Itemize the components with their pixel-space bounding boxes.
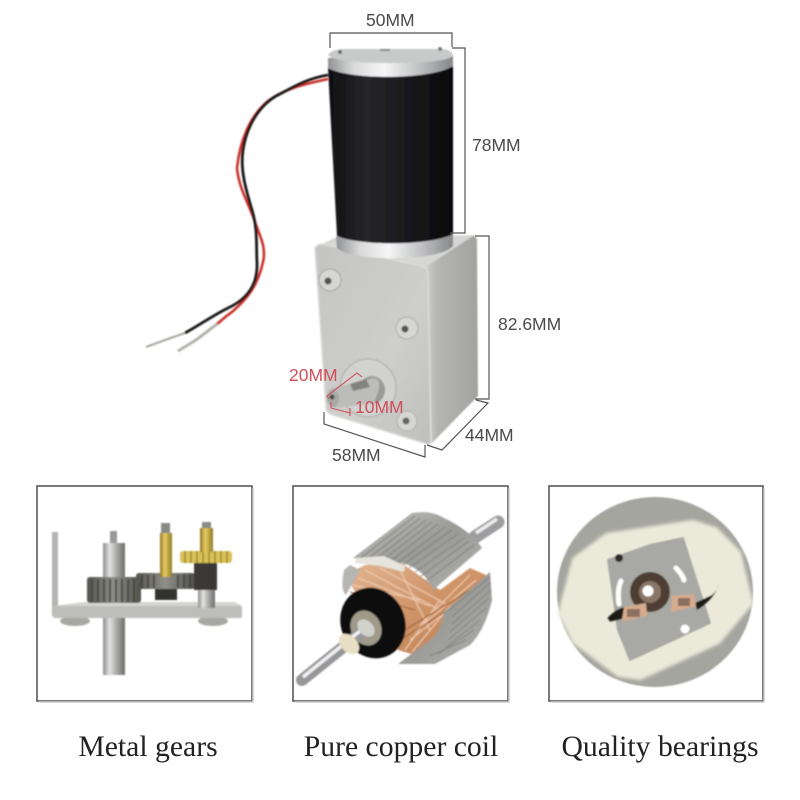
lower lamination: [398, 572, 492, 664]
motor body: [328, 66, 453, 243]
gearbox: [315, 235, 478, 444]
product photo: worm gear motor: [146, 47, 478, 444]
caption: Quality bearings: Quality bearings: [561, 731, 759, 763]
black washer: [329, 577, 417, 669]
copper windings: [345, 562, 486, 655]
dimension brackets: [324, 33, 489, 457]
panel: metal gears: [37, 486, 253, 702]
panel: bearings: [549, 486, 764, 702]
gear assembly illustration: [52, 522, 242, 675]
plastic housing: [561, 523, 750, 677]
output shaft: [327, 359, 396, 417]
brush arm: [607, 607, 625, 622]
mounting bolt: [319, 269, 341, 291]
collar: [335, 630, 363, 658]
bushing: [630, 572, 670, 612]
label: 20MM: 20MM: [289, 365, 338, 385]
red shaft brackets: [327, 373, 362, 416]
bearing illustration: [557, 497, 753, 687]
left stator edge: [342, 565, 360, 595]
copper brush tab: [622, 603, 647, 621]
brush arm: [695, 583, 719, 610]
mounting bolt: [397, 411, 417, 431]
upper lamination: [353, 512, 482, 590]
label: 50MM: 50MM: [366, 10, 415, 30]
motor base ring: [336, 232, 453, 258]
mounting bolt: [396, 317, 418, 339]
caption: Metal gears: Metal gears: [78, 731, 218, 763]
caption: Pure copper coil: Pure copper coil: [304, 731, 498, 763]
motor wires: [146, 75, 328, 351]
label: 44MM: 44MM: [465, 425, 514, 445]
label: 58MM: 58MM: [332, 445, 381, 465]
slots: [618, 581, 621, 604]
front shaft: [302, 632, 362, 680]
panel: copper coil: [293, 486, 509, 702]
rotor illustration: [302, 512, 498, 680]
label: 82.6MM: 82.6MM: [498, 314, 561, 334]
label: 78MM: 78MM: [472, 135, 521, 155]
rear shaft: [475, 522, 498, 537]
copper brush tab: [671, 594, 696, 612]
metal plate: [608, 538, 710, 660]
motor top cap: [328, 47, 453, 77]
label: 10MM: 10MM: [355, 397, 404, 417]
